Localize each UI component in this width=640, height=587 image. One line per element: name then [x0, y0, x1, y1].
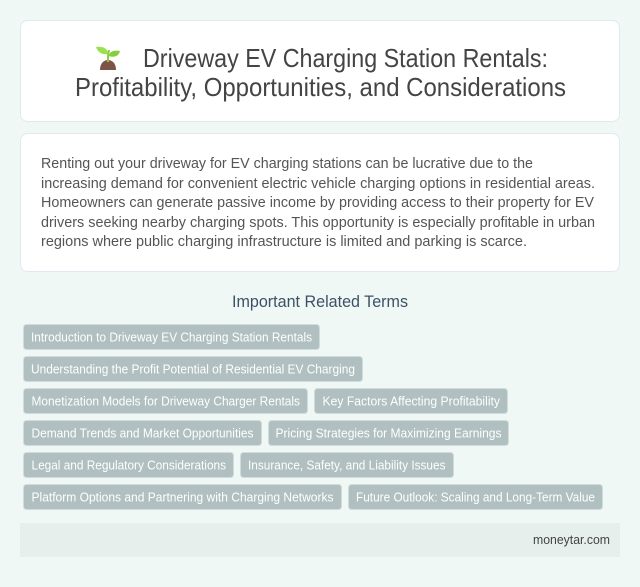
- panel: description card: [20, 134, 620, 272]
- title: [75, 43, 566, 102]
- tag: Demand Trends and Market Opportunities: [32, 426, 254, 440]
- description text: Homeowners can generate passive income by providing access to their property for EV: [41, 194, 594, 211]
- title: Profitability, Opportunities, and Considerations: [75, 72, 566, 102]
- description text: drivers seeking nearby charging spots. This opportunity is especially profitable in urban: [41, 214, 595, 231]
- icon: sprout: [96, 47, 120, 70]
- tag: [24, 420, 262, 446]
- tag: Platform Options and Partnering with Charging Networks: [32, 490, 334, 504]
- tag: Pricing Strategies for Maximizing Earnings: [276, 426, 502, 440]
- tag: [348, 484, 602, 510]
- tag: [24, 356, 362, 382]
- footer: [20, 523, 620, 557]
- tag: Introduction to Driveway EV Charging Station Rentals: [31, 330, 312, 344]
- tag: [24, 324, 320, 350]
- panel: title card: [20, 20, 620, 122]
- description text: increasing demand for convenient electric vehicle charging options in residential areas.: [41, 175, 595, 192]
- tag: Monetization Models for Driveway Charger Rentals: [32, 394, 300, 408]
- tag: [240, 452, 454, 478]
- description text: regions where public charging infrastructure is limited and parking is scarce.: [41, 233, 527, 250]
- tag: [268, 420, 508, 446]
- tag: Future Outlook: Scaling and Long-Term Value: [356, 490, 595, 504]
- tag: [24, 452, 234, 478]
- tag: Understanding the Profit Potential of Residential EV Charging: [31, 362, 355, 376]
- related terms tags: [24, 324, 602, 510]
- heading: important related terms: Important Related Terms: [232, 292, 408, 311]
- description text: Renting out your driveway for EV charging stations can be lucrative due to the: [41, 155, 533, 172]
- tag: [314, 388, 508, 414]
- title: Driveway EV Charging Station Rentals:: [143, 43, 548, 73]
- tag: [24, 484, 342, 510]
- tag: [24, 388, 308, 414]
- footer: site name: moneytar.com: [533, 532, 610, 547]
- description text: [41, 155, 595, 250]
- tag: Insurance, Safety, and Liability Issues: [248, 458, 446, 472]
- tag: Legal and Regulatory Considerations: [32, 458, 226, 472]
- tag: Key Factors Affecting Profitability: [322, 394, 500, 408]
